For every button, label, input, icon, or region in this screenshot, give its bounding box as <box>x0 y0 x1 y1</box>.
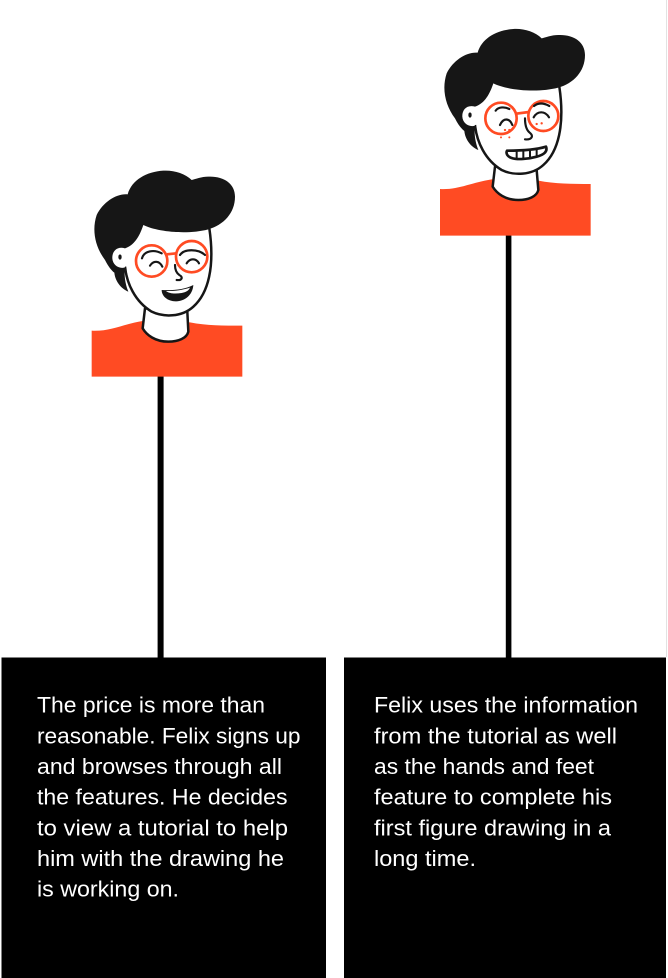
nose <box>525 118 532 139</box>
shirt <box>440 179 591 236</box>
mouth <box>162 285 193 301</box>
connector pole: right <box>506 234 511 658</box>
glasses <box>485 101 558 134</box>
neck <box>143 308 188 342</box>
freckles <box>500 122 543 138</box>
caption text: Felix uses the information <box>374 693 638 718</box>
caption text <box>37 693 300 902</box>
caption text: from the tutorial as well <box>374 723 617 748</box>
eyes and brows <box>142 250 205 280</box>
caption text: him with the drawing he <box>37 846 284 871</box>
caption text: long time. <box>374 846 476 871</box>
shirt <box>92 321 242 377</box>
caption text: reasonable. Felix signs up <box>37 723 300 748</box>
neck <box>493 167 538 200</box>
character: Felix laughing (left) <box>92 171 242 377</box>
face <box>475 78 561 174</box>
panel: right caption <box>344 658 666 978</box>
mouth <box>507 147 546 159</box>
glasses <box>136 241 207 277</box>
caption text: and browses through all <box>37 754 282 779</box>
hair <box>444 29 585 150</box>
hair <box>94 171 235 292</box>
nose <box>175 265 182 280</box>
caption text: to view a tutorial to help <box>37 815 288 840</box>
caption text: as the hands and feet <box>374 754 594 779</box>
caption text: the features. He decides <box>37 785 288 810</box>
caption text: feature to complete his <box>374 785 612 810</box>
eyes and brows <box>496 103 549 139</box>
face <box>125 220 211 315</box>
ear <box>462 106 475 126</box>
caption text: The price is more than <box>37 693 265 718</box>
caption text: is working on. <box>37 877 179 902</box>
connector pole: left <box>158 376 164 658</box>
ear <box>112 248 125 268</box>
caption text: first figure drawing in a <box>374 815 612 840</box>
character: Felix grinning (right) <box>440 29 591 236</box>
panel: left caption <box>2 658 326 978</box>
caption text <box>374 693 638 871</box>
